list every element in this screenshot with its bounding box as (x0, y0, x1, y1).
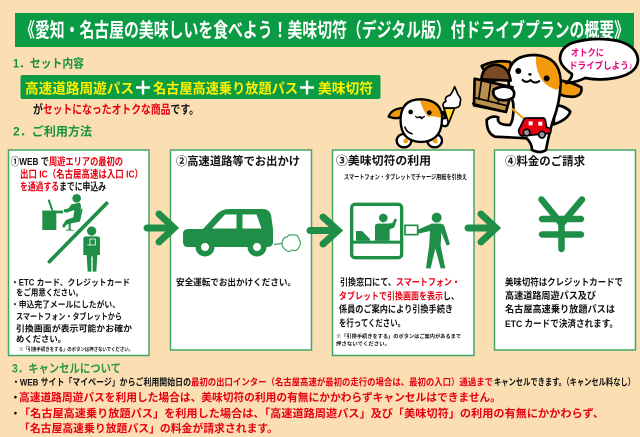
title banner (15, 13, 634, 47)
arrow: step 3 to 4 (468, 214, 496, 242)
mascot: small dog with ice cream (389, 87, 461, 147)
rule 1 (12, 376, 635, 388)
step 1 notes: ・申込完了メールにしたがい、 (11, 298, 120, 310)
icon: car with exhaust (183, 209, 300, 256)
step 4 text: 名古屋高速乗り放題パスは (505, 304, 615, 316)
rule 2: ・ (10, 392, 21, 404)
speech bubble: ドライブしよう♪ (569, 60, 633, 72)
step 3 text: 押さないでください。 (336, 340, 390, 348)
step 1 notes: ・ETC カード、クレジットカード (11, 278, 130, 288)
cancellation rules (10, 376, 635, 435)
heading: section 2: 2．ご利用方法 (13, 124, 92, 138)
rule 3 (10, 406, 604, 435)
rule 3: ・ (10, 408, 21, 420)
step 2 text: 安全運転でお出かけください。 (176, 276, 296, 288)
mascot: big dog with wooden tub and red car (472, 55, 581, 152)
rule 1: ・WEB サイト「マイページ」からご利用開始日の (12, 376, 191, 388)
speech bubble: オトクに (571, 48, 604, 59)
step 3 text: 係員のご案内により引換手続き (339, 304, 453, 316)
set contents bar: 高速道路周遊パス (25, 80, 134, 96)
rule 1: 最初の出口インター（名古屋高速が最初の走行の場合は、最初の入口）通過まで (191, 376, 493, 388)
step 1 notes: 引換画面が表示可能かお確か (16, 322, 132, 334)
icon: desk worker and in-person user (42, 194, 107, 272)
set contents bar: 名古屋高速乗り放題パス (153, 80, 298, 96)
heading: section 1: 1．セット内容 (13, 56, 84, 70)
step 4 text: 美味切符はクレジットカードで (505, 276, 623, 288)
rule 3: 「名古屋高速乗り放題パス」を利用した場合は、「高速道路周遊パス」及び「美味切符」の利用の有無にかかわらず、 (19, 406, 604, 420)
panel: step 3 (332, 150, 474, 356)
arrow: step 2 to 3 (310, 217, 338, 244)
step 3 text: 引換窓口にて、スマートフォン・ (340, 276, 460, 288)
step 3 text (336, 276, 461, 348)
step 1 notes: めください。 (16, 334, 66, 344)
set description: がセットになったオトクな商品です。 (33, 102, 199, 116)
step 1 heading (11, 155, 143, 193)
heading: section 3: 3．キャンセルについて (12, 362, 121, 376)
panel: step 1 (8, 150, 149, 356)
rule 3: 「名古屋高速乗り放題パス」の料金が請求されます。 (19, 421, 278, 435)
icon: exchange window (352, 204, 450, 268)
step 1 heading: ①WEB で周遊エリアの最初の (11, 155, 123, 168)
step 3 subheading: スマートフォン・タブレットでチャージ用紙を引換え (344, 172, 467, 181)
step 1 notes (11, 278, 133, 353)
step 3 text: ※「引換手続きをする」のボタンはご案内があるまで (336, 332, 461, 340)
arrow: step 1 to 2 (147, 214, 174, 242)
step 1 notes: をご用意ください。 (16, 286, 83, 298)
step 3 text: を行ってください。 (339, 318, 405, 330)
step 1 heading: を通過するまでに申込み (20, 180, 106, 193)
panel: step 2 (170, 150, 312, 350)
step 3 text: タブレットで引換画面を表示し、 (339, 290, 459, 302)
icon: yen sign (542, 200, 582, 249)
step 1 notes: スマートフォン・タブレットから (16, 310, 122, 322)
step 4 heading: ④料金のご請求 (505, 154, 585, 168)
step 2 heading: ②高速道路等でお出かけ (176, 154, 300, 168)
step 3 heading: ③美味切符の利用 (336, 154, 431, 168)
step 4 text (505, 276, 623, 330)
set contents bar: 美味切符 (318, 80, 373, 96)
step 1 heading: 出口 IC（名古屋高速は入口 IC） (20, 168, 143, 180)
speech bubble (560, 39, 638, 83)
panel: step 4 (494, 150, 636, 350)
step 4 text: ETC カードで決済されます。 (505, 318, 618, 330)
set contents bar (20, 75, 380, 99)
rule 2: 高速道路周遊パスを利用した場合は、美味切符の利用の有無にかかわらずキャンセルはできません。 (19, 390, 501, 404)
step 1 notes: ※「引換手続きをする」のボタンは押さないでください。 (19, 346, 133, 353)
step 4 text: 高速道路周遊パス及び (505, 290, 596, 302)
